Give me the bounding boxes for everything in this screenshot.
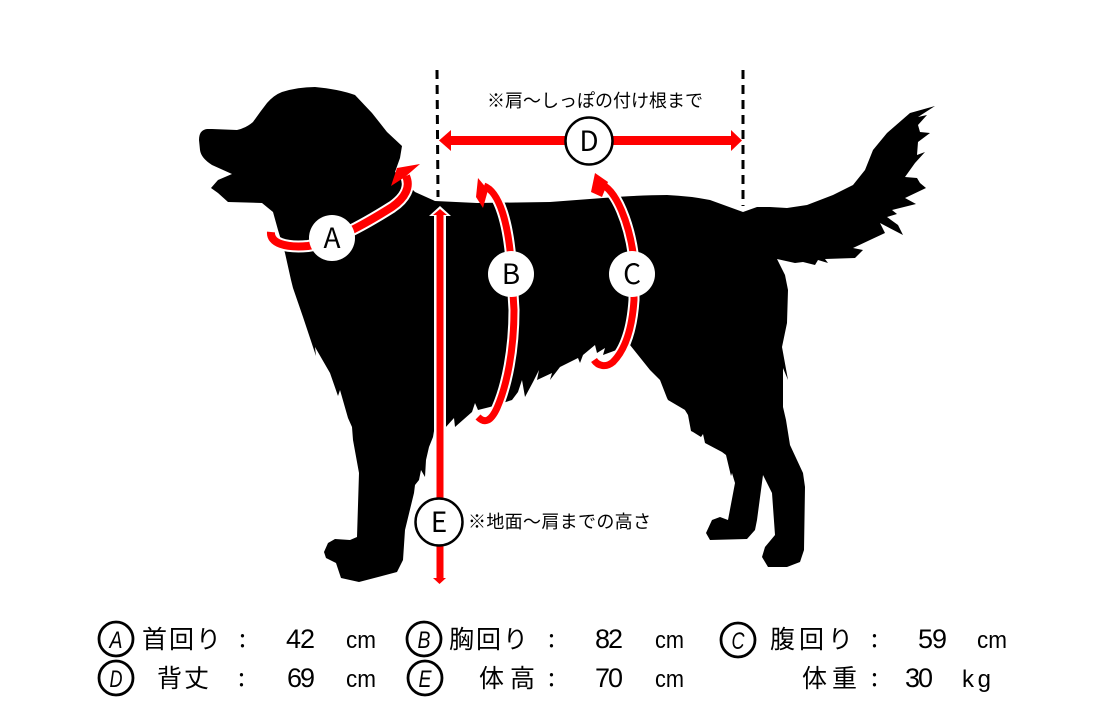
- row: back length: :: [238, 658, 245, 694]
- row: waist: 59: [918, 624, 947, 654]
- row: height: cm: [655, 666, 684, 693]
- row: back length: D: [110, 666, 122, 693]
- row: weight: 30: [905, 663, 933, 693]
- dog silhouette: [199, 87, 935, 582]
- row: height: :: [548, 658, 555, 694]
- badge A: A: [323, 217, 341, 257]
- row: back length: 背丈: [157, 659, 209, 695]
- row: height: 体高: [479, 659, 535, 695]
- note: height: ※地面～肩までの高さ: [468, 508, 651, 534]
- dashed guide: shoulder: [437, 70, 438, 197]
- row: back length: 69: [287, 663, 315, 693]
- arrow B: chest: [476, 178, 514, 421]
- row: neck: 42: [286, 624, 315, 654]
- badge C: C: [623, 253, 641, 293]
- badge B: [488, 251, 534, 297]
- arrow E: height: [429, 206, 451, 584]
- badge B: B: [502, 253, 520, 293]
- row: waist: C: [732, 628, 745, 655]
- badge A: [309, 215, 355, 261]
- row: waist: [721, 619, 1007, 657]
- row: chest: cm: [655, 627, 684, 654]
- row: chest: 胸回り: [449, 620, 528, 656]
- row: waist: 腹回り: [770, 620, 853, 656]
- row: back length: [99, 658, 376, 695]
- arrow C: waist: [591, 173, 634, 366]
- row: back length: cm: [346, 666, 376, 693]
- row: height: E: [418, 666, 432, 693]
- row: weight: :: [871, 658, 878, 694]
- arrow A: neck: [271, 164, 420, 246]
- dashed guide: tail base: [742, 70, 744, 206]
- arrow D: back length: [439, 130, 742, 151]
- measurements table: [99, 619, 1007, 695]
- row: chest: 82: [595, 624, 623, 654]
- badge E: E: [431, 501, 447, 541]
- row: neck: cm: [346, 627, 376, 654]
- badge C: [609, 251, 655, 297]
- badge D: [566, 118, 612, 164]
- row: neck: 首回り: [142, 620, 221, 656]
- row: weight: 体重: [802, 659, 857, 695]
- row: weight: kg: [962, 666, 991, 693]
- row: chest: [407, 619, 684, 656]
- note: back length: ※肩～しっぽの付け根まで: [487, 87, 703, 113]
- badge E: [416, 498, 462, 546]
- row: neck: A: [108, 627, 122, 654]
- row: weight: [802, 658, 991, 695]
- badge D: D: [579, 120, 599, 160]
- row: neck: :: [239, 619, 246, 655]
- row: chest: B: [418, 627, 430, 654]
- row: neck: [99, 619, 376, 656]
- row: height: 70: [595, 663, 623, 693]
- row: waist: :: [871, 619, 878, 655]
- row: height: [408, 658, 684, 695]
- row: waist: cm: [977, 627, 1007, 654]
- row: chest: :: [548, 619, 555, 655]
